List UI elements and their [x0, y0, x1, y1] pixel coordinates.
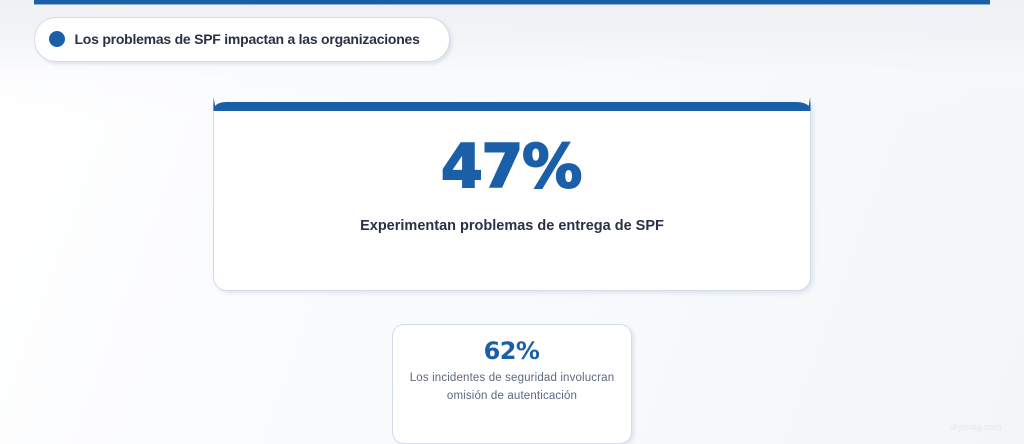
- section heading pill: [34, 17, 450, 62]
- panel: main statistic card: [213, 102, 811, 291]
- secondary statistic description: Los incidentes de seguridad involucran: [410, 372, 614, 384]
- secondary statistic number: 62%: [484, 337, 539, 365]
- card top accent bar with corner spikes: [213, 97, 811, 111]
- top accent bar: [34, 0, 990, 4]
- main statistic number: 47%: [441, 132, 581, 202]
- panel: secondary statistic card: [392, 324, 632, 444]
- heading text: Los problemas de SPF impactan a las organizaciones: [74, 31, 420, 47]
- secondary statistic description: omisión de autenticación: [447, 390, 577, 402]
- secondary statistic description: [410, 372, 614, 402]
- main statistic description: Experimentan problemas de entrega de SPF: [360, 218, 664, 234]
- icon: blue dot: [48, 31, 64, 47]
- watermark: skysnag.com: [949, 422, 1002, 432]
